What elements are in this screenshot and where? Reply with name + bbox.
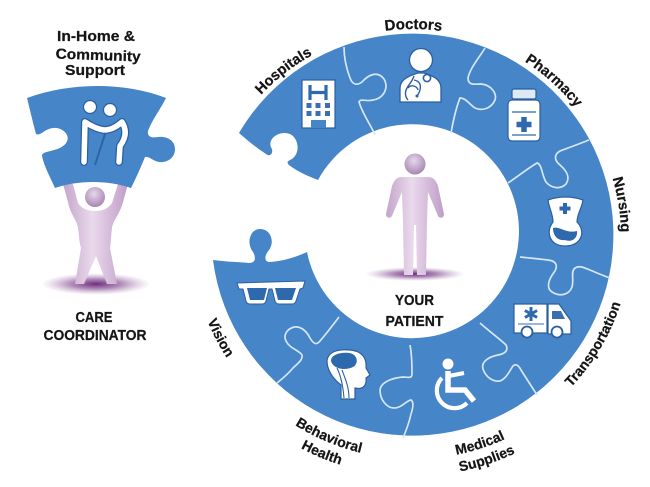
icon: wheelchair — [437, 358, 474, 408]
label: vision: Vision — [208, 317, 232, 358]
label: hospitals: Hospitals — [254, 49, 312, 94]
icon: brain head — [327, 350, 370, 399]
patient caption: PATIENT — [386, 314, 444, 330]
icon: nurse — [548, 197, 583, 246]
care coordinator caption: COORDINATOR — [44, 328, 147, 344]
care coordinator caption — [44, 310, 147, 344]
care coordinator caption: CARE — [76, 310, 113, 326]
icon: glasses — [237, 281, 305, 304]
patient figure — [365, 154, 465, 281]
support label: Community — [55, 47, 141, 65]
icon: two people with cane — [84, 100, 125, 165]
support label: In-Home & — [57, 29, 136, 45]
patient caption: YOUR — [395, 293, 434, 309]
label: doctors: Doctors — [384, 19, 442, 31]
icon: pharmacy bottle — [508, 89, 540, 141]
label: health: Health — [302, 440, 342, 465]
label: medical: Medical — [455, 430, 504, 455]
puzzle piece: in-home and community support — [27, 86, 175, 188]
label: behavioral: Behavioral — [296, 417, 362, 453]
care coordinator figure — [41, 184, 151, 295]
ring body — [213, 34, 613, 436]
icon: hospital — [302, 80, 335, 128]
icon: ambulance — [514, 304, 571, 338]
puzzle ring — [208, 19, 630, 471]
label: pharmacy: Pharmacy — [525, 54, 582, 106]
label: nursing: Nursing — [612, 176, 630, 232]
piece dividers — [277, 47, 610, 438]
support label — [55, 29, 141, 79]
support label: Support — [65, 63, 125, 79]
label: transportation: Transportation — [564, 302, 620, 386]
label: supplies: Supplies — [459, 447, 514, 471]
patient caption — [386, 293, 444, 330]
icon: doctor — [400, 48, 441, 102]
